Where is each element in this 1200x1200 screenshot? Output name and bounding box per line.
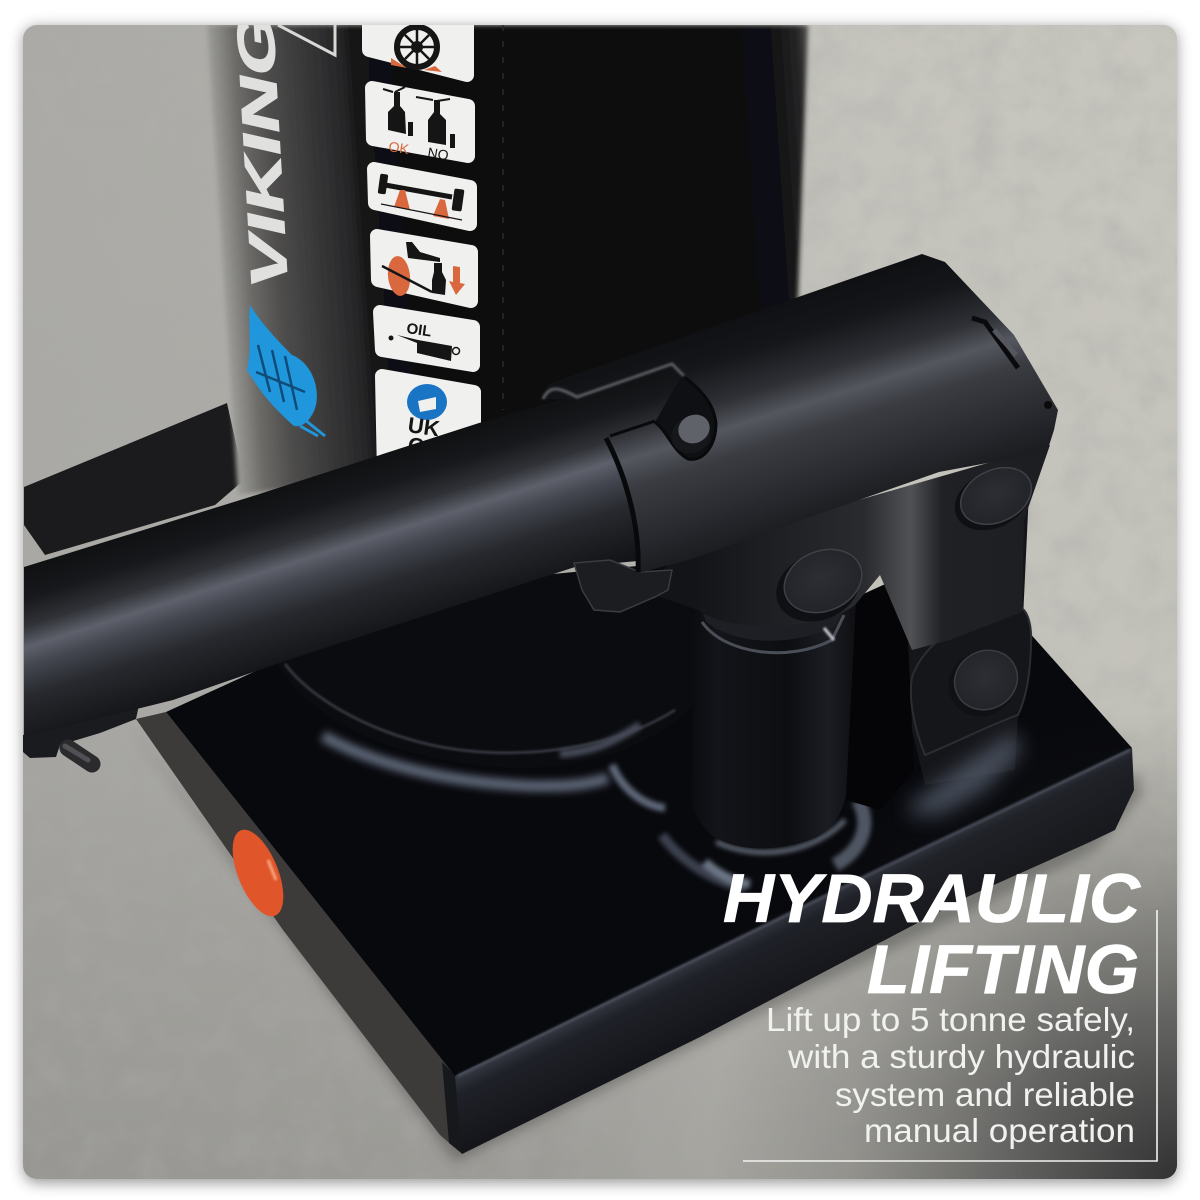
description text: system and reliable: [835, 1076, 1135, 1113]
sticker: read manual: [382, 376, 474, 475]
cylinder foot: [308, 565, 668, 654]
sticker: ok / no jack placement: NO: [427, 144, 450, 163]
sticker: read manual: UK: [406, 412, 441, 441]
description text: manual operation: [864, 1112, 1135, 1149]
pump handle tube: [24, 365, 700, 737]
description text: with a sturdy hydraulic: [787, 1038, 1135, 1075]
piston weld gloss: [612, 765, 864, 888]
under-handle linkage parts at left: [23, 700, 140, 764]
ground shadows around base: [168, 770, 1146, 1164]
sticker: oil: [380, 312, 473, 365]
heading line 2: LIFTING: [867, 931, 1139, 1008]
jack cylinder body: [207, 6, 808, 495]
link bolt: [954, 650, 1018, 710]
warning triangle outline: [278, 25, 335, 55]
pivot bolt right: [945, 457, 1041, 542]
sticker: wheel chocks: [369, 18, 467, 75]
base plate: [136, 560, 1134, 1154]
pivot bolt centre: [766, 538, 871, 634]
sticker: oil: OIL: [405, 320, 433, 340]
heading line 1: HYDRAULIC: [723, 860, 1141, 937]
sticker: ok / no jack placement: [372, 87, 468, 163]
right weld gloss: [910, 732, 1022, 815]
notch recess: [655, 375, 716, 459]
logo: blue ship: [247, 305, 325, 436]
rear base plate: [24, 403, 244, 555]
sleeve seam: [606, 438, 638, 572]
sticker: read manual: CA: [406, 432, 441, 461]
sticker: ok / no jack placement: OK: [388, 138, 411, 157]
description text: Lift up to 5 tonne safely,: [766, 1001, 1135, 1038]
right end details: [972, 318, 1018, 368]
retaining pin: [672, 414, 710, 450]
heading: [723, 860, 1141, 1008]
caption frame line: [743, 910, 1157, 1161]
cylinder foot weld: [285, 664, 675, 786]
reflector: [232, 830, 284, 916]
label seam: [502, 25, 504, 410]
casting lump under sleeve: [574, 560, 672, 612]
caption scrim: [700, 700, 1177, 1179]
pivot bracket: [640, 445, 1050, 650]
link plate and bolt: [911, 606, 1031, 755]
base front lip: [455, 748, 1134, 1154]
sticker: chock wheel and lower: [377, 236, 471, 301]
safety pictogram stickers: [369, 18, 474, 475]
piston column: [692, 598, 856, 848]
base side face: [136, 712, 462, 1154]
right support column: [850, 507, 1028, 808]
tab gloss: [543, 364, 684, 399]
handle socket sleeve: [543, 254, 1058, 573]
sticker: axle stands: [374, 169, 470, 224]
logo wordmark: VIKING: [226, 6, 300, 295]
base top surface: [166, 560, 1132, 1076]
description text: [766, 1001, 1135, 1149]
sleeve body: [543, 254, 1058, 573]
